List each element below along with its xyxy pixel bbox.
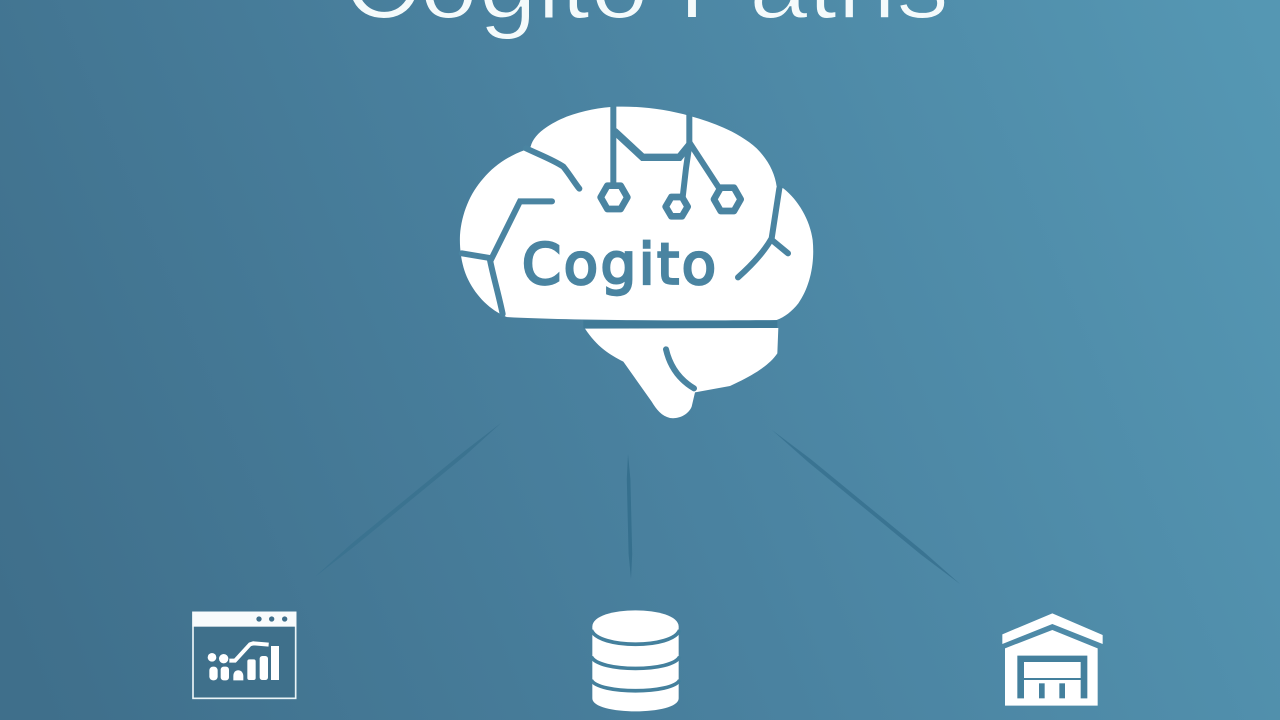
brain upper lobe	[460, 107, 813, 320]
connector: brain to warehouse	[772, 430, 960, 584]
disk separators	[591, 630, 680, 691]
brain lower lobe	[585, 328, 778, 418]
database body	[592, 610, 679, 711]
cerebellum divider	[583, 312, 777, 336]
roof	[1002, 613, 1103, 644]
bar chart	[208, 646, 279, 680]
brain label: Cogito	[522, 233, 716, 298]
icon: brain with circuit traces	[460, 106, 813, 418]
window title bar	[192, 612, 296, 627]
connector: brain to database	[627, 454, 632, 579]
icon: database	[591, 610, 680, 711]
trend line	[229, 643, 269, 661]
icon: warehouse	[1002, 613, 1103, 706]
building	[1005, 630, 1098, 706]
icon: analytics dashboard window	[192, 612, 296, 698]
window frame	[193, 612, 296, 698]
circuit traces and sulci	[462, 106, 788, 388]
connector: brain to dashboard	[316, 423, 501, 576]
window buttons	[256, 616, 287, 622]
garage door	[1017, 656, 1087, 698]
circuit nodes	[601, 186, 741, 216]
